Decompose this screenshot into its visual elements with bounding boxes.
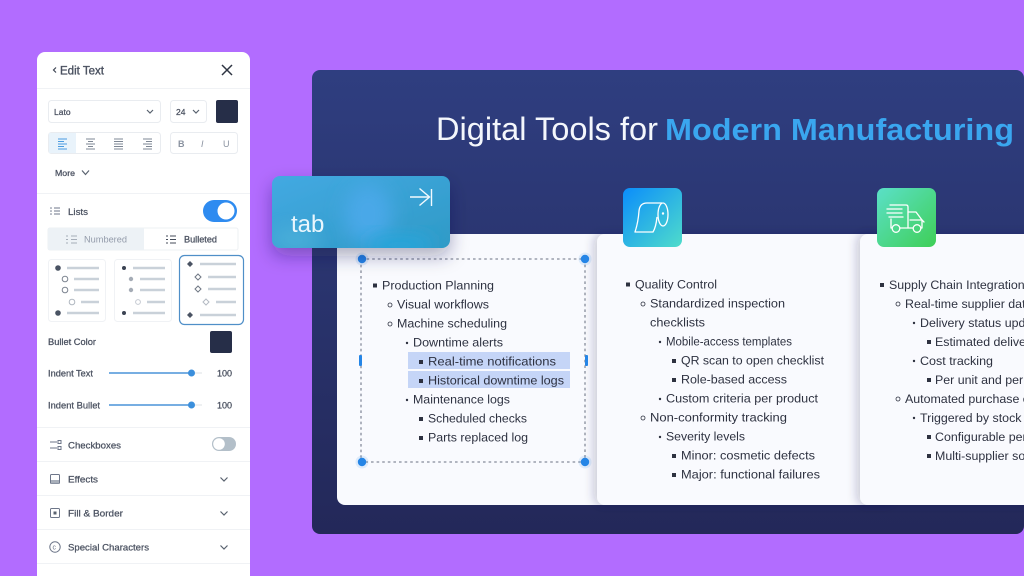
slide panel — [312, 70, 1024, 534]
list: production planning: Scheduled checks — [428, 412, 527, 426]
indent text slider: 100 — [217, 368, 232, 378]
fill and border row — [50, 508, 228, 520]
list: production planning: Real-time notifications — [428, 354, 556, 368]
tab label: tab — [291, 211, 324, 238]
list type tabs — [48, 228, 238, 250]
indent bullet slider: 100 — [217, 400, 232, 410]
slide title: Modern Manufacturing — [665, 112, 1014, 147]
list: production planning: Maintenance logs — [413, 392, 510, 406]
icon: tab arrow — [410, 188, 432, 206]
list: production planning: Parts replaced log — [428, 430, 528, 444]
panel header — [54, 65, 232, 78]
alignment controls: B — [178, 139, 185, 149]
list: production planning: Historical downtime logs — [428, 374, 564, 388]
list: quality control: Mobile-access templates — [666, 334, 792, 348]
list type tabs: Numbered — [84, 234, 127, 244]
lists row — [50, 200, 237, 222]
list: production planning: Machine scheduling — [397, 316, 507, 330]
lists row: Lists — [68, 207, 88, 218]
selection box — [356, 252, 592, 468]
list type tabs: Bulleted — [184, 234, 217, 244]
special characters row — [50, 542, 227, 554]
list: supply chain — [880, 278, 1024, 463]
special characters row: c — [52, 544, 56, 552]
alignment controls: U — [223, 139, 230, 149]
list: quality control — [626, 278, 825, 482]
card: quality control — [597, 234, 897, 505]
list: quality control: QR scan to open checklist — [681, 354, 825, 368]
bullet color — [48, 331, 232, 353]
special characters row: Special Characters — [68, 542, 149, 554]
bullet style option 3 selected — [180, 256, 244, 324]
list: quality control: Severity levels — [666, 430, 745, 444]
list: quality control: checklists — [650, 316, 705, 330]
list: supply chain: Cost tracking — [920, 354, 993, 368]
panel header: Edit Text — [60, 66, 105, 78]
icon: paper roll — [623, 188, 682, 247]
indent text slider — [48, 368, 232, 378]
list: quality control: Major: functional failures — [681, 468, 820, 482]
alignment controls — [48, 132, 238, 154]
list: production planning: Visual workflows — [397, 298, 489, 312]
tab key — [271, 176, 450, 255]
bullet color: Bullet Color — [48, 337, 96, 347]
checkboxes row: Checkboxes — [68, 440, 121, 452]
slide title — [438, 116, 1012, 146]
list: production planning: Production Planning — [382, 278, 494, 292]
list: quality control: Non-conformity tracking — [650, 410, 787, 424]
effects row: Effects — [68, 474, 98, 486]
list: quality control: Minor: cosmetic defects — [681, 448, 815, 462]
fill and border row: Fill & Border — [68, 508, 123, 520]
card: production planning — [337, 234, 604, 505]
indent bullet slider — [48, 400, 232, 410]
font controls: Lato — [54, 107, 71, 117]
list: production planning: Downtime alerts — [413, 336, 503, 350]
more dropdown — [55, 168, 89, 178]
slide title: Digital Tools for — [436, 111, 658, 147]
selected text highlights — [408, 352, 570, 388]
indent text slider: Indent Text — [48, 368, 94, 378]
indent bullet slider: Indent Bullet — [48, 400, 101, 410]
bullet style option 2 — [114, 260, 172, 322]
bullet style option 1 — [48, 260, 106, 322]
font controls — [48, 100, 238, 123]
checkboxes row — [50, 437, 236, 452]
font controls: 24 — [176, 107, 186, 117]
icon: delivery truck — [877, 188, 936, 247]
alignment controls: I — [201, 139, 204, 149]
effects row — [50, 474, 228, 486]
card: supply chain — [860, 234, 1024, 505]
list: quality control: Quality Control — [635, 278, 717, 292]
more dropdown: More — [55, 168, 75, 178]
list: supply chain: Supply Chain Integration — [889, 278, 1024, 292]
list: quality control: Custom criteria per product — [666, 392, 819, 406]
list: production planning — [373, 278, 564, 444]
panel: edit text sidebar — [37, 52, 250, 576]
list: quality control: Standardized inspection — [650, 296, 785, 310]
list: quality control: Role-based access — [681, 372, 787, 386]
